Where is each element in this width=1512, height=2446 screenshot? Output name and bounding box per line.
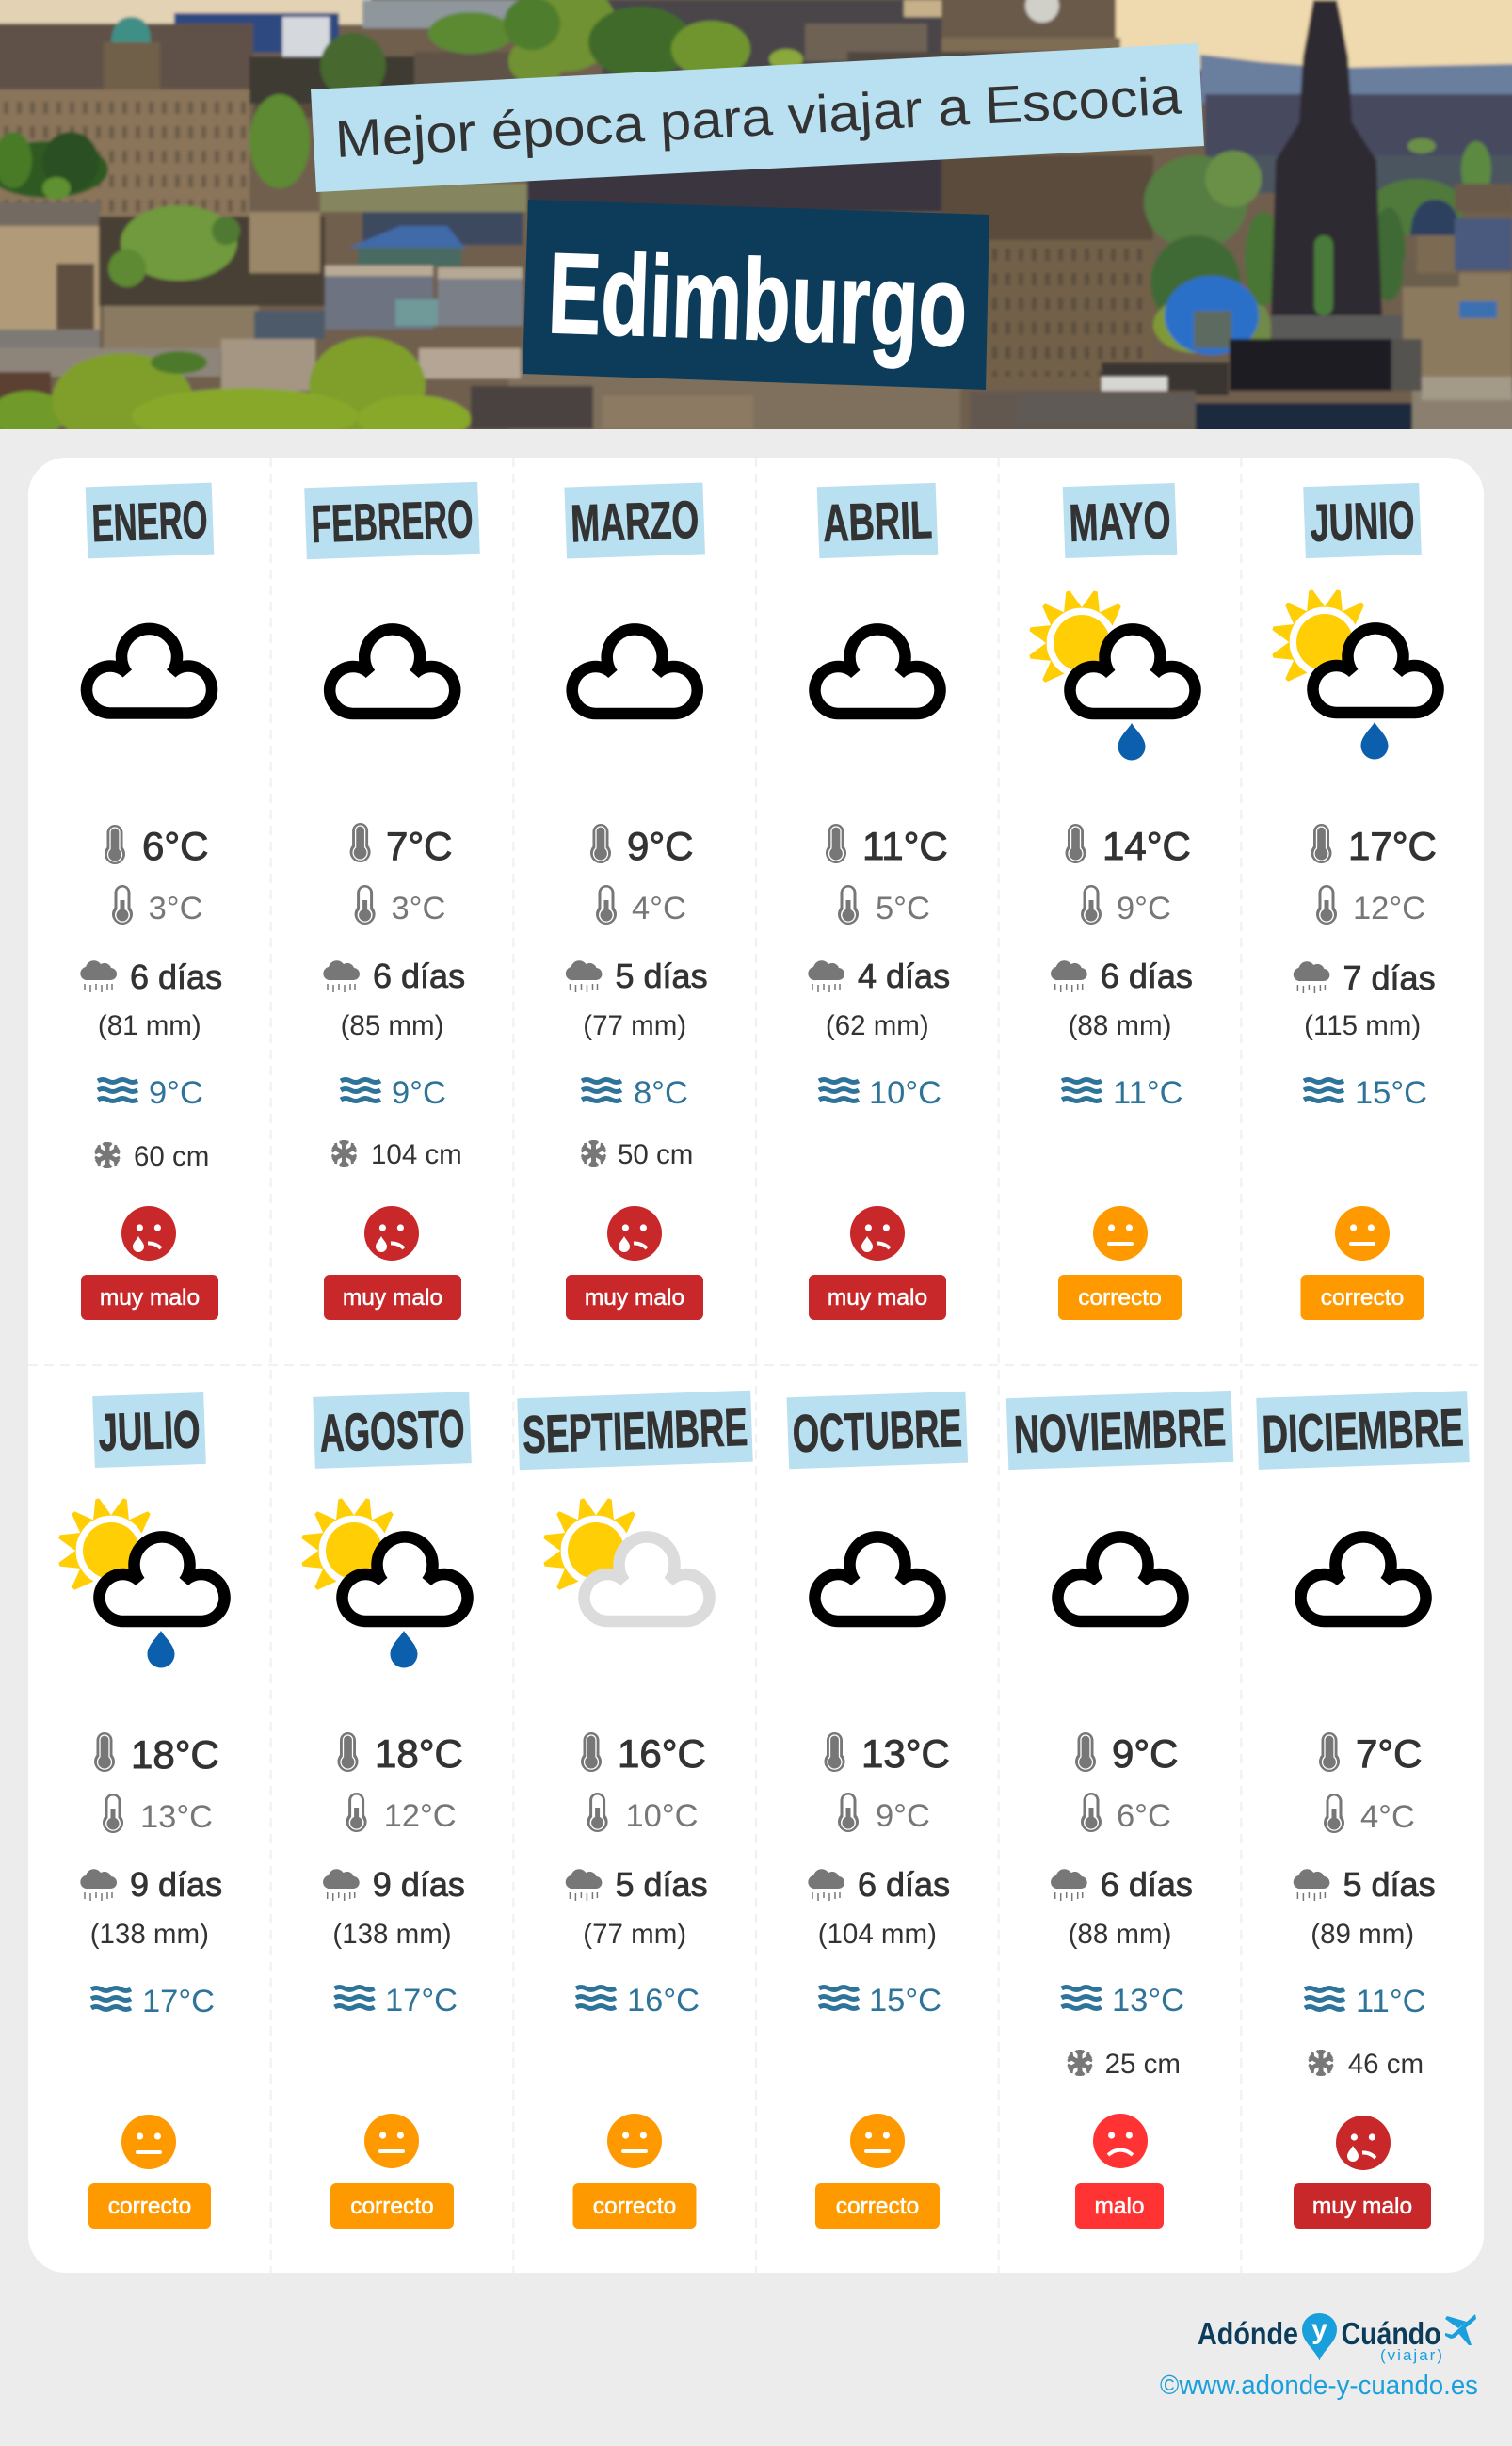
month heading: MAYO — [1068, 490, 1172, 553]
min temperature — [587, 1793, 699, 1834]
rating badge: correcto — [1321, 1285, 1404, 1311]
rainfall: (77 mm) — [583, 1919, 686, 1950]
rain days — [323, 1865, 465, 1904]
min temperature: 12°C — [1353, 891, 1425, 926]
min temperature — [355, 885, 445, 926]
rainfall: (62 mm) — [826, 1010, 929, 1041]
snow — [1309, 2049, 1424, 2080]
month heading: NOVIEMBRE — [1013, 1397, 1227, 1464]
icon: cloud — [814, 629, 941, 714]
snow — [582, 1139, 693, 1170]
centre roofs and boxes — [320, 184, 527, 212]
rating face — [850, 1206, 905, 1261]
rain days: 7 días — [1343, 958, 1436, 997]
rain days: 6 días — [858, 1865, 950, 1904]
rainfall: (89 mm) — [1311, 1919, 1414, 1950]
max temperature: 18°C — [131, 1732, 219, 1777]
icon: plane — [1445, 2314, 1476, 2345]
sea temperature — [582, 1075, 688, 1111]
month heading — [564, 482, 705, 559]
snow: 46 cm — [1348, 2049, 1424, 2080]
min temperature: 3°C — [149, 891, 203, 926]
rainfall: (115 mm) — [1304, 1010, 1421, 1041]
rain days — [1294, 958, 1436, 997]
max temperature — [1319, 1731, 1422, 1776]
month heading: ABRIL — [822, 490, 933, 553]
snow — [95, 1141, 209, 1172]
rain days: 5 días — [616, 957, 708, 995]
month heading — [92, 1392, 206, 1468]
rain days — [80, 957, 222, 996]
sea temperature — [1062, 1075, 1183, 1111]
snow: 60 cm — [134, 1141, 209, 1172]
rain days — [1051, 957, 1193, 995]
sea temperature: 10°C — [869, 1075, 941, 1111]
max temperature: 16°C — [618, 1731, 706, 1776]
sea temperature — [819, 1983, 941, 2019]
sea temperature: 16°C — [627, 1983, 700, 2019]
max temperature: 13°C — [861, 1731, 950, 1776]
rating badge: muy malo — [100, 1285, 200, 1311]
min temperature: 9°C — [876, 1798, 930, 1834]
rain days: 9 días — [373, 1865, 465, 1904]
rating badge — [815, 2183, 940, 2229]
sea temperature — [1062, 1983, 1184, 2019]
sea temperature: 15°C — [869, 1983, 941, 2019]
rating badge — [1058, 1275, 1182, 1320]
min temperature — [838, 1793, 930, 1834]
min temperature: 12°C — [384, 1798, 457, 1834]
rainfall: (88 mm) — [1069, 1919, 1171, 1950]
panel: julio — [56, 1392, 225, 2229]
panel: marzo — [564, 482, 708, 1320]
rain days — [808, 957, 950, 995]
month heading — [1063, 483, 1177, 558]
rainfall: (138 mm) — [90, 1919, 209, 1950]
month heading — [304, 482, 480, 559]
panel: noviembre — [1006, 1391, 1233, 2229]
rating badge — [572, 2183, 697, 2229]
min temperature — [1081, 1793, 1171, 1834]
icon: cloud — [572, 629, 698, 714]
sea temperature: 9°C — [149, 1075, 203, 1111]
rainfall: (81 mm) — [98, 1010, 201, 1041]
rating badge: malo — [1094, 2194, 1145, 2219]
rating badge — [566, 1275, 703, 1320]
month heading: AGOSTO — [318, 1398, 466, 1463]
rating badge: muy malo — [1312, 2194, 1412, 2219]
sea temperature — [1305, 1984, 1426, 2020]
rating face — [1093, 2114, 1148, 2168]
min temperature: 3°C — [392, 891, 445, 926]
min temperature: 4°C — [1360, 1799, 1415, 1835]
min temperature: 10°C — [625, 1798, 699, 1834]
max temperature: 18°C — [375, 1731, 463, 1776]
month heading: ENERO — [90, 490, 209, 553]
rating badge: correcto — [108, 2194, 191, 2219]
panel: abril — [808, 483, 950, 1320]
logo word: Cuándo: Cuándo — [1342, 2316, 1441, 2351]
rating face — [1336, 2116, 1391, 2170]
sea temperature: 9°C — [392, 1075, 446, 1111]
sea temperature: 15°C — [1355, 1075, 1427, 1111]
max temperature: 17°C — [1348, 824, 1437, 868]
rating face — [1335, 1206, 1390, 1261]
panel: septiembre — [517, 1391, 753, 2229]
logo: Adónde y Cuándo — [1198, 2313, 1476, 2364]
rain days — [808, 1865, 950, 1904]
rating badge — [1075, 2183, 1164, 2229]
snow: 50 cm — [618, 1139, 693, 1170]
icon: location pin: y — [1311, 2314, 1327, 2345]
min temperature: 4°C — [632, 891, 686, 926]
icon: sun, cloud and rain drop — [1270, 587, 1439, 759]
city name: Edimburgo — [546, 229, 969, 371]
sea temperature — [91, 1984, 215, 2020]
rating face — [607, 1206, 662, 1261]
month heading — [817, 483, 938, 558]
min temperature — [596, 885, 686, 926]
max temperature — [350, 823, 452, 868]
max temperature: 9°C — [1112, 1731, 1179, 1776]
panel: agosto — [299, 1392, 472, 2229]
rating badge — [81, 1275, 218, 1320]
month heading: MARZO — [570, 490, 700, 553]
min temperature: 9°C — [1117, 891, 1171, 926]
rain days: 6 días — [130, 957, 222, 996]
rain days — [566, 1865, 708, 1904]
rainfall: (88 mm) — [1069, 1010, 1171, 1041]
left lower buildings — [0, 224, 102, 331]
rating face — [607, 2114, 662, 2168]
icon: cloud — [1300, 1537, 1426, 1621]
sea temperature: 13°C — [1112, 1983, 1184, 2019]
panel: enero — [80, 483, 222, 1320]
rating badge: correcto — [836, 2194, 919, 2219]
max temperature: 6°C — [142, 824, 209, 868]
min temperature — [838, 885, 930, 926]
icon: cloud — [330, 629, 455, 714]
sea temperature — [576, 1983, 700, 2019]
sea temperature — [335, 1983, 458, 2019]
city banner — [523, 200, 989, 390]
panel: diciembre — [1256, 1391, 1470, 2229]
rating badge — [88, 2183, 211, 2229]
rain days: 5 días — [1343, 1865, 1436, 1904]
min temperature: 5°C — [876, 891, 930, 926]
rainfall: (77 mm) — [583, 1010, 686, 1041]
rainfall: (104 mm) — [818, 1919, 937, 1950]
website url: ©www.adonde-y-cuando.es — [1160, 2371, 1478, 2401]
sea temperature — [819, 1075, 941, 1111]
rating badge: muy malo — [585, 1285, 684, 1311]
rainfall: (85 mm) — [341, 1010, 443, 1041]
min temperature: 6°C — [1117, 1798, 1171, 1834]
header photo: Edinburgh skyline — [0, 0, 1512, 447]
max temperature: 7°C — [1356, 1731, 1422, 1776]
rating badge — [330, 2183, 454, 2229]
wall behind title — [602, 0, 942, 74]
month heading — [787, 1392, 968, 1469]
rating badge — [1294, 2183, 1431, 2229]
logo tagline: (viajar) — [1380, 2346, 1442, 2364]
sea temperature: 8°C — [634, 1075, 688, 1111]
greenery — [0, 0, 1491, 447]
month heading — [1006, 1391, 1233, 1470]
right buildings — [1403, 273, 1512, 386]
sky and distance — [0, 0, 371, 24]
month heading: JUNIO — [1309, 490, 1416, 553]
rating badge: muy malo — [343, 1285, 442, 1311]
month heading: OCTUBRE — [792, 1398, 963, 1463]
rain days: 6 días — [373, 957, 465, 995]
month heading — [313, 1392, 472, 1469]
rain days: 4 días — [858, 957, 950, 995]
sea temperature — [98, 1075, 203, 1111]
rain days — [80, 1865, 222, 1904]
title text: Mejor época para viajar a Escocia — [333, 65, 1183, 169]
rating badge — [809, 1275, 946, 1320]
rating badge — [1301, 1275, 1424, 1320]
month heading — [86, 483, 214, 558]
sea temperature: 17°C — [142, 1984, 215, 2020]
rating face — [364, 2114, 419, 2168]
rain days: 5 días — [616, 1865, 708, 1904]
min temperature — [1324, 1794, 1415, 1835]
logo word: Adónde: Adónde — [1198, 2316, 1298, 2351]
max temperature: 14°C — [1102, 824, 1191, 868]
max temperature — [590, 824, 693, 868]
rating face — [121, 2115, 176, 2169]
min temperature: 13°C — [140, 1799, 213, 1835]
rating face — [121, 1206, 176, 1261]
rating badge: correcto — [350, 2194, 434, 2219]
ball — [1165, 276, 1259, 355]
rating face — [364, 1206, 419, 1261]
icon: location pin — [1302, 2313, 1337, 2361]
icon: cloud — [1057, 1537, 1183, 1621]
rain days — [1051, 1865, 1193, 1904]
month heading: SEPTIEMBRE — [522, 1397, 748, 1464]
panel: calendar card — [28, 458, 1484, 2273]
title banner — [311, 43, 1204, 192]
panel: octubre — [787, 1392, 968, 2229]
month heading: FEBRERO — [310, 489, 475, 554]
icon: sun, cloud and rain drop — [299, 1496, 468, 1668]
rain days: 9 días — [130, 1865, 222, 1904]
panel: junio — [1270, 483, 1439, 1320]
rating badge: correcto — [593, 2194, 676, 2219]
min temperature — [346, 1793, 457, 1834]
rain days: 6 días — [1101, 1865, 1193, 1904]
black box and roofs — [1230, 339, 1391, 391]
icon: cloud — [814, 1537, 941, 1621]
rating badge: correcto — [1078, 1285, 1162, 1311]
rain days: 6 días — [1101, 957, 1193, 995]
icon: cloud — [87, 629, 212, 714]
min temperature — [1316, 885, 1425, 926]
rain days — [1294, 1865, 1436, 1904]
rating face — [850, 2114, 905, 2168]
rainfall: (138 mm) — [332, 1919, 452, 1950]
rating badge — [324, 1275, 461, 1320]
rating face — [1093, 1206, 1148, 1261]
icon: sun and grey cloud — [541, 1496, 710, 1621]
snow: 104 cm — [371, 1139, 462, 1170]
icon: sun, cloud and rain drop — [56, 1496, 225, 1668]
min temperature — [103, 1794, 213, 1835]
max temperature — [105, 824, 209, 868]
sea temperature — [1304, 1075, 1427, 1111]
max temperature: 11°C — [862, 824, 948, 868]
min temperature — [112, 885, 203, 926]
rain days — [323, 957, 465, 995]
sea temperature — [341, 1075, 446, 1111]
max temperature — [826, 824, 948, 868]
sea temperature: 11°C — [1113, 1075, 1183, 1111]
icon: sun, cloud and rain drop — [1027, 588, 1196, 761]
sea temperature: 11°C — [1356, 1984, 1426, 2020]
rating badge: muy malo — [828, 1285, 927, 1311]
month heading — [517, 1391, 753, 1470]
month heading — [1303, 483, 1422, 558]
max temperature: 7°C — [386, 824, 452, 868]
hotel and centre block — [525, 160, 943, 213]
rain days — [566, 957, 708, 995]
top left buildings — [174, 13, 339, 53]
sea temperature: 17°C — [385, 1983, 458, 2019]
max temperature: 9°C — [627, 824, 693, 868]
panel: febrero — [304, 482, 480, 1320]
snow — [331, 1139, 462, 1170]
min temperature — [1081, 885, 1171, 926]
Scott monument — [1271, 0, 1382, 315]
panel: mayo — [1027, 483, 1196, 1320]
snow: 25 cm — [1105, 2049, 1181, 2080]
snow — [1068, 2049, 1181, 2080]
max temperature — [1075, 1731, 1179, 1776]
month heading: JULIO — [97, 1399, 201, 1462]
